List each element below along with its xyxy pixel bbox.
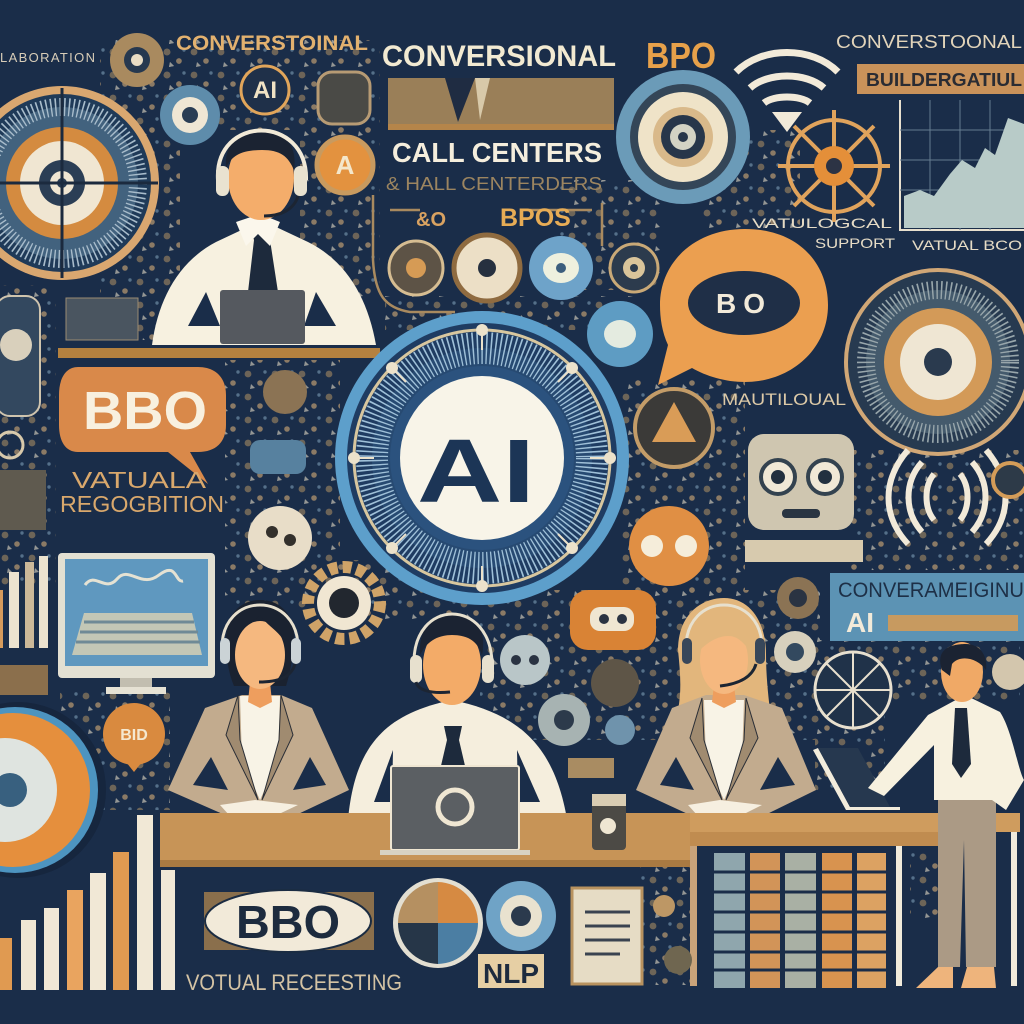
text: virtual recognition: VATUALA xyxy=(72,467,207,493)
open laptop xyxy=(813,748,900,810)
speech bubble BBO: BBO xyxy=(83,381,207,441)
pie wheel xyxy=(393,878,483,968)
agent right woman xyxy=(636,598,816,822)
data table chart xyxy=(710,853,890,988)
label: virtual support: VATULOGCAL xyxy=(752,215,892,231)
text: virtual recognition: REGOGBITION xyxy=(60,491,224,517)
bar chart left xyxy=(0,556,48,695)
heading: BPO top: BPO xyxy=(646,35,716,76)
small bottom icons xyxy=(653,895,692,974)
presenter man xyxy=(868,642,1024,988)
heading: conversational left: CONVERSTOINAL xyxy=(176,32,368,55)
badge BBO bottom: BBO xyxy=(236,896,340,948)
icon: wifi xyxy=(736,52,838,132)
BPOs row xyxy=(373,195,658,367)
laptop center xyxy=(380,766,530,855)
central AI circle xyxy=(335,311,629,605)
monitor xyxy=(58,553,215,694)
banner xyxy=(857,64,1024,94)
bar chart bottom-left xyxy=(0,815,175,990)
image band xyxy=(388,78,614,130)
cup xyxy=(592,794,626,850)
bottom-left orange dial xyxy=(0,702,106,878)
text: virtual receesting: VOTUAL RECEESTING xyxy=(186,970,402,995)
badge BID: BID xyxy=(120,727,148,744)
icon: roulette xyxy=(815,652,891,728)
heading: conversational right: CONVERSTOONAL xyxy=(836,32,1022,52)
label: multilingual: MAUTILOUAL xyxy=(722,390,846,409)
banner conversational AI xyxy=(830,573,1024,641)
heading: conversional: CONVERSIONAL xyxy=(382,40,616,73)
central AI circle: AI xyxy=(417,422,535,522)
document icon xyxy=(572,888,642,984)
top-left target dial xyxy=(0,86,159,280)
icon: ship wheel xyxy=(778,110,890,222)
small icons row xyxy=(500,635,639,778)
text: virtual recognition xyxy=(60,467,224,517)
top-left label: LABORATION xyxy=(0,50,95,65)
blue circle icon xyxy=(486,881,556,951)
BPOs row: &O xyxy=(416,209,446,231)
badge BBO bottom xyxy=(204,890,374,952)
A badge: A xyxy=(336,150,355,180)
banner: BUILDERGATIUL xyxy=(866,70,1022,90)
icon: sound waves xyxy=(888,450,1006,544)
desk xyxy=(160,813,1020,986)
banner conversational AI: AI xyxy=(846,607,874,638)
desk top-left xyxy=(58,348,380,358)
icon: hexagon xyxy=(635,389,713,467)
orange chat pill xyxy=(570,590,656,650)
left side icon panel xyxy=(0,296,138,416)
agent top xyxy=(152,130,376,345)
subheading: call centers: & HALL CENTERDERS xyxy=(386,174,602,194)
right dial xyxy=(846,270,1024,454)
BPOs row: BPOS xyxy=(500,204,571,232)
left small icons xyxy=(0,370,312,570)
label: virtual support xyxy=(752,215,1022,253)
heading: call centers: CALL CENTERS xyxy=(392,137,602,168)
chart: area xyxy=(900,100,1024,230)
robot xyxy=(745,434,863,562)
badge BID xyxy=(103,703,165,772)
label: virtual support: VATUAL BCO xyxy=(912,237,1022,253)
label: NLP: NLP xyxy=(483,958,539,989)
speech bubble BBO xyxy=(59,367,226,484)
label: virtual support: SUPPORT xyxy=(815,235,896,251)
speech bubble BO: BO xyxy=(716,288,772,319)
small right icons xyxy=(774,463,1024,690)
agent center man xyxy=(347,613,569,832)
top-left small icons xyxy=(110,33,373,193)
gear icon xyxy=(308,567,380,639)
agent left woman xyxy=(168,600,349,822)
orange face circle xyxy=(629,506,709,586)
speech bubble BO xyxy=(658,229,828,385)
AI small icon: AI xyxy=(253,77,277,104)
top dial center-right xyxy=(616,70,750,204)
